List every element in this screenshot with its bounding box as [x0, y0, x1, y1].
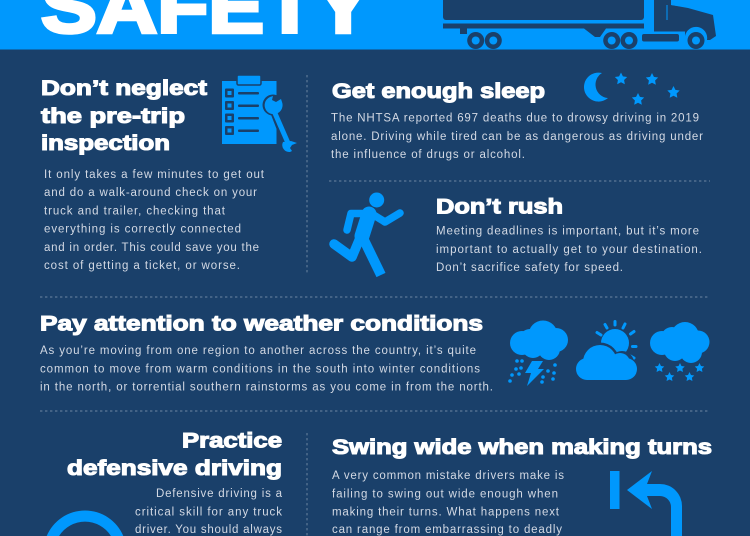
- heading: defensive driving: defensive driving: [67, 457, 282, 480]
- heading: defensive driving: [67, 430, 282, 480]
- text: don't rush: Don’t sacrifice safety for speed.: [436, 262, 623, 274]
- heading: defensive driving: Practice: [182, 430, 282, 453]
- panel: get enough sleep: [331, 72, 703, 161]
- icon: moon and stars: [584, 72, 680, 105]
- text: don't rush: [436, 226, 702, 274]
- text: defensive driving: Defensive driving is a: [156, 488, 283, 500]
- heading: get enough sleep: Get enough sleep: [332, 80, 545, 103]
- panel: defensive driving: [47, 430, 283, 536]
- text: swing wide: can range from embarrassing to deadly: [332, 524, 562, 536]
- text: swing wide: [332, 470, 564, 536]
- text: weather conditions: common to move from warm conditions in the south into winter conditions: [40, 364, 480, 376]
- text: defensive driving: driver. You should always: [135, 524, 282, 536]
- heading: don't rush: Don’t rush: [436, 196, 563, 219]
- text: get enough sleep: alone. Driving while tired can be as dangerous as driving under: [331, 131, 703, 143]
- text: pre-trip inspection: everything is correctly connected: [44, 224, 241, 236]
- icon: left turn arrow: [610, 471, 682, 536]
- text: swing wide: making their turns. What happens next: [332, 506, 560, 518]
- icon: sun behind cloud: [576, 322, 637, 382]
- panel: weather conditions: [40, 313, 710, 394]
- heading: pre-trip inspection: the pre-trip: [41, 105, 185, 128]
- panel: swing wide: [332, 436, 712, 536]
- heading: weather conditions: Pay attention to weather conditions: [40, 313, 483, 336]
- text: get enough sleep: The NHTSA reported 697 deaths due to drowsy driving in 2019: [331, 113, 699, 125]
- text: swing wide: failing to swing out wide enough when: [332, 488, 558, 500]
- text: get enough sleep: the influence of drugs or alcohol.: [331, 149, 525, 161]
- panel: don't rush: [334, 192, 702, 275]
- icon: steering wheel: [47, 510, 123, 536]
- heading: pre-trip inspection: inspection: [41, 132, 170, 155]
- text: defensive driving: critical skill for any truck: [135, 506, 282, 518]
- text: pre-trip inspection: cost of getting a ticket, or worse.: [44, 260, 240, 272]
- icon: snow cloud: [650, 322, 710, 381]
- text: get enough sleep: [331, 113, 703, 161]
- text: swing wide: A very common mistake drivers make is: [332, 470, 564, 482]
- text: pre-trip inspection: and do a walk-around check on your: [44, 187, 257, 199]
- heading: pre-trip inspection: Don’t neglect: [41, 77, 207, 100]
- text: don't rush: Meeting deadlines is important, but it’s more: [436, 226, 699, 238]
- heading: swing wide: Swing wide when making turns: [332, 436, 712, 459]
- text: weather conditions: As you’re moving from one region to another across the country, it’s quite: [40, 345, 476, 357]
- text: pre-trip inspection: It only takes a few minutes to get out: [44, 169, 265, 181]
- heading: pre-trip inspection: [41, 77, 207, 155]
- icon: clipboard and wrench: [222, 75, 297, 152]
- vertical divider: [306, 75, 308, 275]
- icon: semi truck: [443, 0, 716, 49]
- text: defensive driving: [135, 488, 283, 536]
- icon: running person: [334, 192, 400, 275]
- text: pre-trip inspection: truck and trailer, checking that: [44, 206, 226, 218]
- icon: storm cloud: [508, 320, 568, 386]
- panel: pre-trip inspection: [41, 75, 297, 272]
- text: pre-trip inspection: and in order. This could save you the: [44, 242, 259, 254]
- text: don't rush: important to actually get to your destination.: [436, 244, 702, 256]
- text: weather conditions: in the north, or torrential southern rainstorms as you come in from the north.: [40, 382, 493, 394]
- text: weather conditions: [40, 345, 493, 394]
- text: pre-trip inspection: [44, 169, 265, 272]
- header banner: [0, 0, 750, 50]
